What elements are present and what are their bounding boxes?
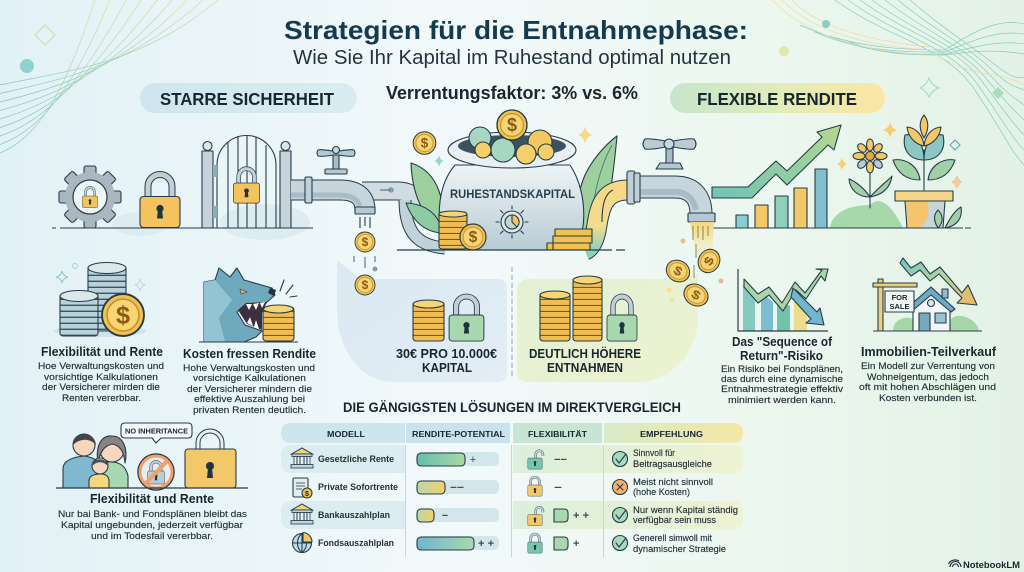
row: Private Sofortrente: −− [450,482,464,494]
icon: big padlock [185,431,236,488]
body text: Wohneigentum, das jedoch [867,371,989,382]
body text: Nur bai Bank- und Fondsplänen bleibt das [58,508,247,519]
body text: der Versicherer mirden die [42,381,160,392]
label [396,347,497,375]
row: Fondsauszahlplan: ++ [478,538,494,550]
wave lines: top left [0,0,218,153]
body text: privaten Renten deutlich. [193,404,306,415]
body text [859,360,996,403]
coin bars right [547,229,592,250]
body text [183,362,315,415]
icon: gear with lock [59,166,121,228]
flower [830,139,903,228]
heading: Flexibilität und Rente [41,345,163,359]
decor: top left shapes [20,25,55,73]
table header: RENDITE-POTENTIAL [412,429,505,439]
row: Fondsauszahlplan: Fondsauszahlplan [318,538,394,548]
illustration: falling coins: $ [671,263,685,279]
icon: silver coin stacks with coin: $ [116,301,130,329]
illustration: falling coins: $ [701,254,717,268]
row: Private Sofortrente [293,477,713,498]
heading: Kosten fressen Rendite [183,347,316,361]
gauge icon [496,206,528,238]
pill: starre Sicherheit [140,83,357,113]
wave lines: top right yellow [772,0,1024,85]
subtitle: Wie Sie Ihr Kapital im Ruhestand optimal nutzen [293,47,731,69]
bars [736,169,827,228]
label: KAPITAL [422,361,472,375]
heading: Verrentungsfaktor: Verrentungsfaktor: 3% vs. 6% [386,83,638,103]
body text: vorsichtige Kalkulationen [44,371,158,382]
table header: EMPFEHLUNG [640,429,703,439]
label: ENTNAHMEN [547,361,623,375]
body text [721,363,843,405]
block: Immobilien-Teilverkauf [859,258,997,403]
block: Sequence of Return [721,269,843,405]
block: Flexibilität und Rente bottom [56,423,248,541]
body text: effektive Auszahlung bei [194,393,305,404]
floating coin: $ [421,136,429,151]
tube: right [585,190,628,250]
illustration: slow drip coins: $ [362,235,369,249]
icon: padlock [140,174,180,228]
icon: house for sale [873,258,982,331]
body text: Entnahmestrategie effektiv [721,383,843,394]
illustration: slow drip coins: $ [362,278,369,292]
body text: und im Todesfail vererbbar. [91,530,213,541]
body text: Ein Risiko bei Fondsplänen, [721,363,843,374]
row: Gesetzliche Rente: Beitragsausgleiche [633,459,712,469]
body text: vorsichtige Kalkulationen [193,372,306,383]
row: Gesetzliche Rente: Gesetzliche Rente [318,454,394,464]
icon: gate [202,135,291,228]
pot label: RUHESTANDSKAPITAL [450,189,575,201]
icon: house for sale: FOR [892,293,908,302]
table header: MODELL [327,429,365,439]
label: DEUTLICH HÖHERE [529,346,641,361]
row: Bankauszahlplan: − [442,510,448,522]
body text [38,360,164,403]
logo: NotebookLM: NotebookLM [963,560,1020,570]
illustration: security row [52,135,313,240]
illustration: growth chart [712,115,971,228]
row: Bankauszahlplan: verfügbar sein muss [633,515,717,525]
rising arrow [712,125,841,198]
row: Fondsauszahlplan: + [573,538,579,550]
leaves [406,136,617,250]
table header: FLEXIBILITÄT [528,429,588,439]
coin stacks [540,276,602,341]
label: 30€ PRO 10.000€ [396,347,497,361]
body text: das durch eine dynamische [721,373,843,384]
row: Gesetzliche Rente: + [470,454,476,466]
title: Strategien für die Entnahmephase: [284,15,748,45]
illustration: left faucet and tube [291,146,445,248]
body text: oft mit hohen Abschlägen und [859,381,996,392]
row shading [281,445,743,557]
row: Fondsauszahlplan [292,532,726,554]
body text: Hohe Verwaltungskosten und [183,362,315,373]
row: Gesetzliche Rente: −− [554,454,567,466]
sparkles [837,122,962,187]
table header [281,423,743,443]
icon: prohibited lock [139,455,173,489]
sparkles [578,126,592,144]
pill: flexible Rendite [670,83,885,113]
decor: top right shapes [779,20,1004,99]
coins in pot: $ [507,115,517,135]
pot rim [448,132,576,168]
heading: Immobilien-Teilverkauf [861,345,997,359]
row: Private Sofortrente: $ [305,491,309,498]
illustration: right faucet [627,139,715,222]
comparison table [281,423,743,557]
illustration: falling coins: $ [689,286,704,303]
illustration: money pot [397,110,628,250]
icon: house for sale: SALE [889,302,910,311]
pot body [439,165,584,250]
body text [58,508,247,541]
icon: risk chart [738,269,828,331]
coins in pot [469,110,554,164]
icon: wolf eating coins [199,268,298,342]
body text: Kapital ungebunden, jederzeit verfügbar [61,519,243,530]
heading: Return"-Risiko [740,349,823,363]
body text: der Versicherer mindern die [187,383,312,394]
icon: family [63,434,128,488]
panel: higher withdrawal [517,274,698,382]
callout: no inheritance [121,423,192,443]
lock [449,297,484,341]
illustration: falling coins [662,222,724,310]
heading: Das "Sequence of [732,335,833,349]
body text: Hoe Verwaltungskosten und [38,360,164,371]
row: Private Sofortrente: (hohe Kosten) [633,487,690,497]
table heading: DIE GÄNGIGSTEN LÖSUNGEN IM DIREKTVERGLEICH [343,399,681,415]
row: Bankauszahlplan: Nur wenn Kapital ständig [633,505,738,515]
row: Gesetzliche Rente [291,448,712,469]
body text: Renten vererbbar. [62,392,141,403]
coin stack left [439,212,467,249]
wave lines: top right [800,0,1024,165]
block: Flexibilität und Rente top [38,262,164,403]
lock [607,297,637,341]
callout: no inheritance: NO INHERITANCE [125,428,188,436]
coin stack [413,302,444,341]
illustration: slow drip coins [354,232,378,295]
row: Private Sofortrente: Private Sofortrente [318,482,398,492]
icon: silver coin stacks with coin [54,262,146,337]
potted plant [893,115,961,228]
row: Fondsauszahlplan: Generell simwoll mit [633,533,712,543]
row: Bankauszahlplan [291,504,738,526]
row: Bankauszahlplan: Bankauszahlplan [318,510,390,520]
body text: Kosten verbunden ist. [879,392,977,403]
floating coin [413,132,436,154]
illustration: money pot: $ [469,229,478,246]
row: Private Sofortrente: − [554,482,562,494]
heading [732,335,833,363]
pill: flexible Rendite: FLEXIBLE RENDITE [697,89,857,109]
row: Gesetzliche Rente: Sinnvoll für [633,448,675,458]
label [529,346,641,375]
row: Bankauszahlplan: ++ [573,510,589,522]
heading: Flexibilität und Rente [90,492,214,506]
panel: low withdrawal [337,260,507,382]
pill: starre Sicherheit: STARRE SICHERHEIT [160,89,334,109]
body text: Ein Modell zur Verrentung von [861,360,995,371]
block: Kosten fressen Rendite [183,268,316,415]
row: Fondsauszahlplan: dynamischer Strategie [633,544,726,554]
divider [511,267,513,376]
body text: minimiert werden kann. [728,394,836,405]
row: Private Sofortrente: Meist nicht sinnvoll [633,477,713,487]
